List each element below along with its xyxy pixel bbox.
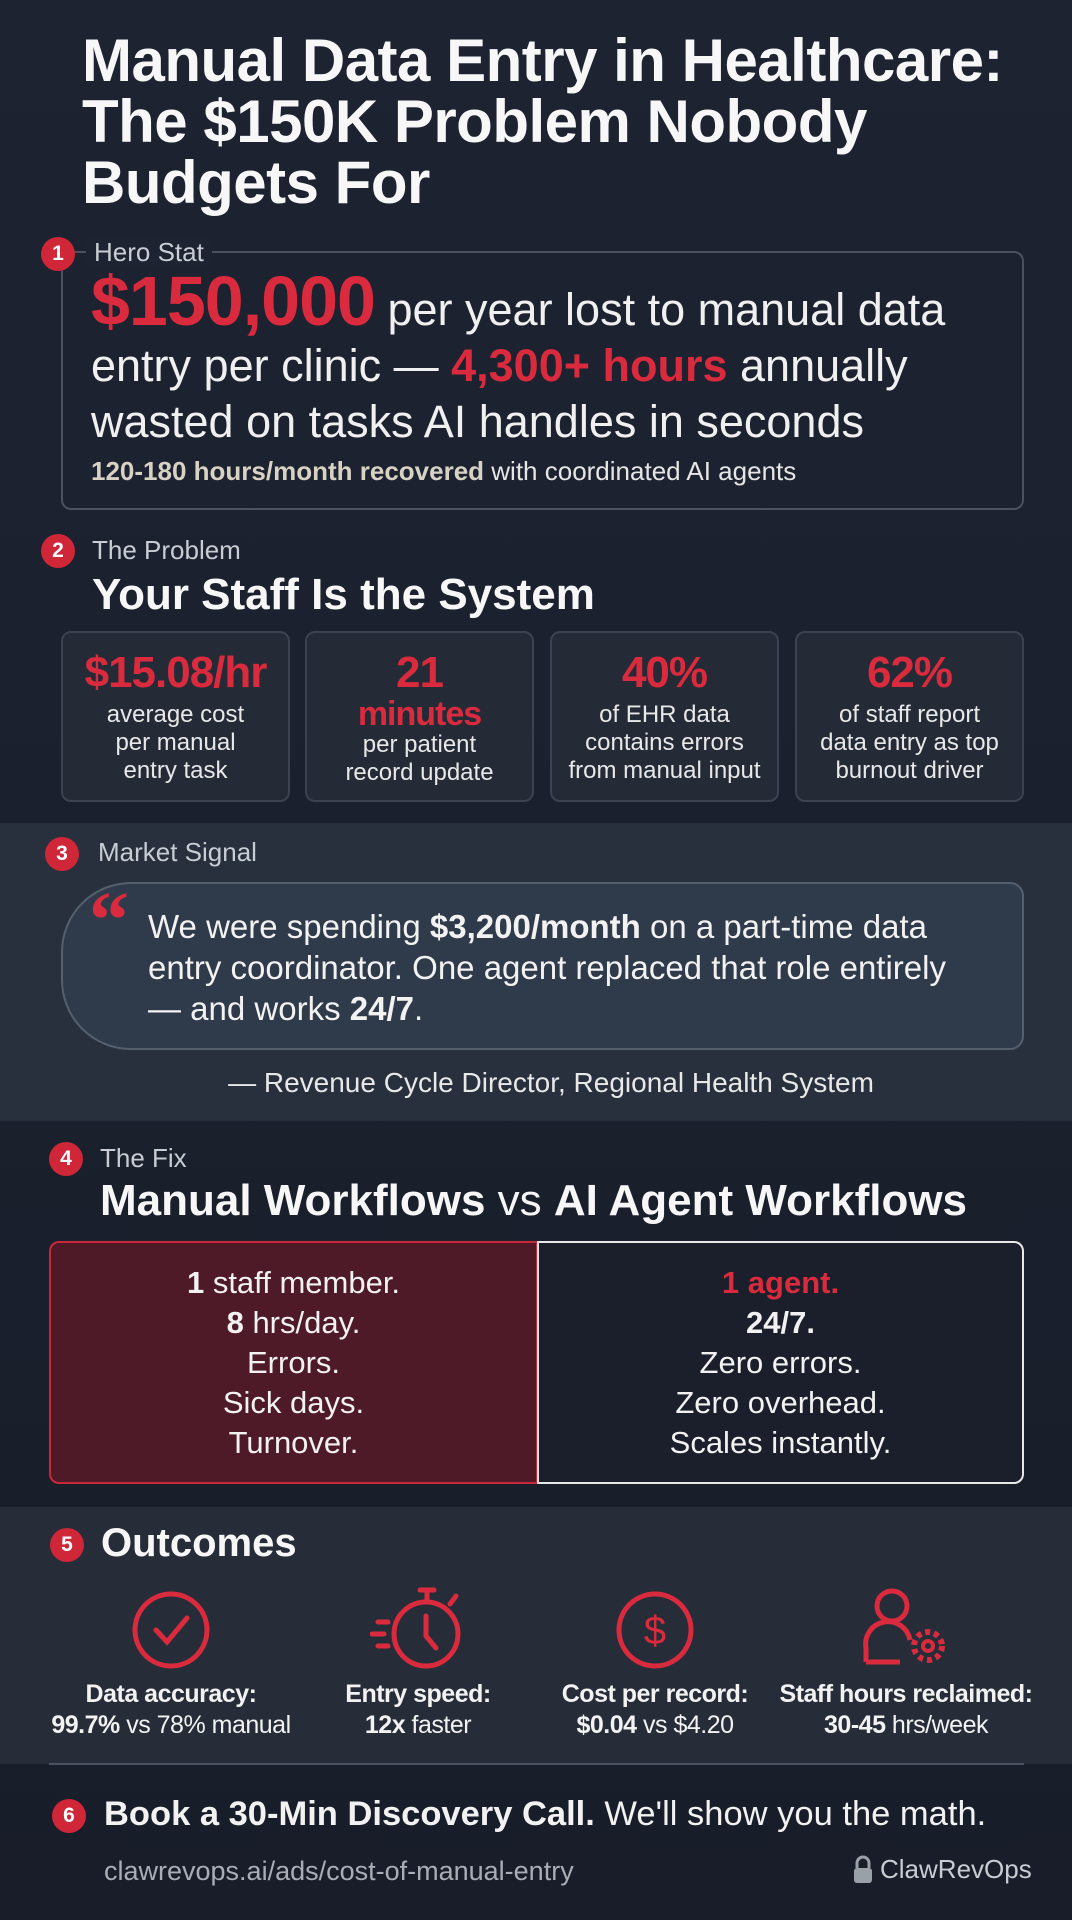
badge 5 [50,1528,84,1562]
manual side: Sick days. [223,1385,364,1420]
outcome 4: Staff hours reclaimed: [780,1680,1032,1708]
comparison [49,1241,1024,1484]
section 3: market signal band [0,823,1072,1121]
attribution: — Revenue Cycle Director, Regional Health System [228,1067,874,1098]
stat card 3: from manual input [568,757,761,784]
outcome 3: Cost per record: [562,1680,748,1708]
manual side: 8 hrs/day. [227,1305,360,1340]
icon: stopwatch [370,1588,460,1668]
stat card 1 [61,631,290,802]
outcome 3: $0.04 vs $4.20 [576,1711,734,1739]
heading: outcomes: Outcomes [101,1521,297,1565]
logo: ClawRevOps [880,1854,1032,1884]
badge 1: 1 [52,242,64,265]
heading: Your Staff Is the System [92,570,595,619]
manual side: Turnover. [229,1425,358,1460]
title: The $150K Problem Nobody [82,88,867,155]
AI side: Zero errors. [700,1345,861,1380]
manual side: Errors. [247,1345,340,1380]
quote text: We were spending $3,200/month on a part-time data [148,908,927,945]
stat card 4: burnout driver [835,757,984,784]
badge 3: 3 [56,842,68,865]
stat card 3: contains errors [585,729,744,756]
hero text: wasted on tasks AI handles in seconds [91,396,864,447]
hero text: entry per clinic — 4,300+ hours annually [91,340,908,391]
section 1: hero stat [41,237,1024,510]
AI side [537,1241,1024,1484]
stat card 2: per patient [363,731,476,758]
url: clawrevops.ai/ads/cost-of-manual-entry [104,1856,574,1886]
quote text: entry coordinator. One agent replaced that role entirely [148,949,946,986]
badge 6: 6 [63,1804,75,1827]
stat card 1: entry task [123,757,228,784]
AI side: 1 agent. [722,1265,839,1300]
quote mark icon: “ [89,877,129,965]
outcome 1 [51,1680,291,1739]
badge 2: 2 [52,539,64,562]
stat card 2: record update [345,759,494,786]
sub stat: 120-180 hours/month recovered with coordinated AI agents [91,456,796,486]
AI side: 24/7. [746,1305,815,1340]
section 4: the fix [49,1142,967,1225]
outcome 2: 12x faster [365,1711,471,1739]
badge 3 [45,837,79,871]
title: Manual Data Entry in Healthcare: [82,27,1003,94]
stat card 2: minutes [358,695,481,733]
icon: user gear [863,1588,945,1664]
badge 4 [49,1142,83,1176]
label: the fix: The Fix [100,1143,187,1173]
section 6: CTA [52,1795,1032,1886]
quote text [148,908,946,1027]
section 2: the problem [41,534,595,619]
stat card 4 [795,631,1024,802]
stat card 2: 21 [396,648,443,697]
icon: dollar circle [616,1592,694,1668]
icon: check circle [132,1592,210,1668]
stat card 4: data entry as top [820,729,999,756]
manual side [49,1241,538,1484]
section 5: outcomes band [0,1507,1072,1764]
outcome 1: 99.7% vs 78% manual [51,1711,291,1739]
outcome 3 [562,1680,748,1739]
AI side: Scales instantly. [670,1425,891,1460]
stat card 2 [305,631,534,802]
hero box [61,251,1024,510]
outcome 2: Entry speed: [345,1680,491,1708]
stat card 4: 62% [867,648,952,697]
stat card 3: of EHR data [599,701,730,728]
CTA text: Book a 30-Min Discovery Call. We'll show you the math. [104,1795,986,1833]
stat card 1: per manual [115,729,236,756]
label: market signal: Market Signal [98,837,257,867]
outcome 4: 30-45 hrs/week [824,1711,988,1739]
quote text: — and works 24/7. [148,990,423,1027]
title [82,27,1003,216]
stat card 1: $15.08/hr [85,648,266,697]
badge 6 [52,1799,86,1833]
title: Budgets For [82,149,430,216]
heading: Manual Workflows vs AI Agent Workflows [100,1176,967,1225]
hero text [90,262,946,447]
badge 2 [41,534,75,568]
stat card 3 [550,631,779,802]
outcome 2 [345,1680,491,1739]
stat card 4: of staff report [839,701,980,728]
stat card 3: 40% [622,648,707,697]
hero text: $150,000 per year lost to manual data [91,262,945,340]
badge 5: 5 [61,1533,73,1556]
badge 4: 4 [60,1147,72,1170]
AI side: Zero overhead. [675,1385,886,1420]
label: the problem: The Problem [92,535,241,565]
outcome 1: Data accuracy: [86,1680,256,1708]
stat card 1: average cost [107,701,244,728]
icon: dollar circle: $ [644,1609,666,1653]
label: hero stat: Hero Stat [94,237,204,267]
manual side: 1 staff member. [187,1265,400,1300]
quote box [61,882,1024,1050]
outcome 4 [780,1680,1032,1739]
badge 1 [41,237,75,271]
